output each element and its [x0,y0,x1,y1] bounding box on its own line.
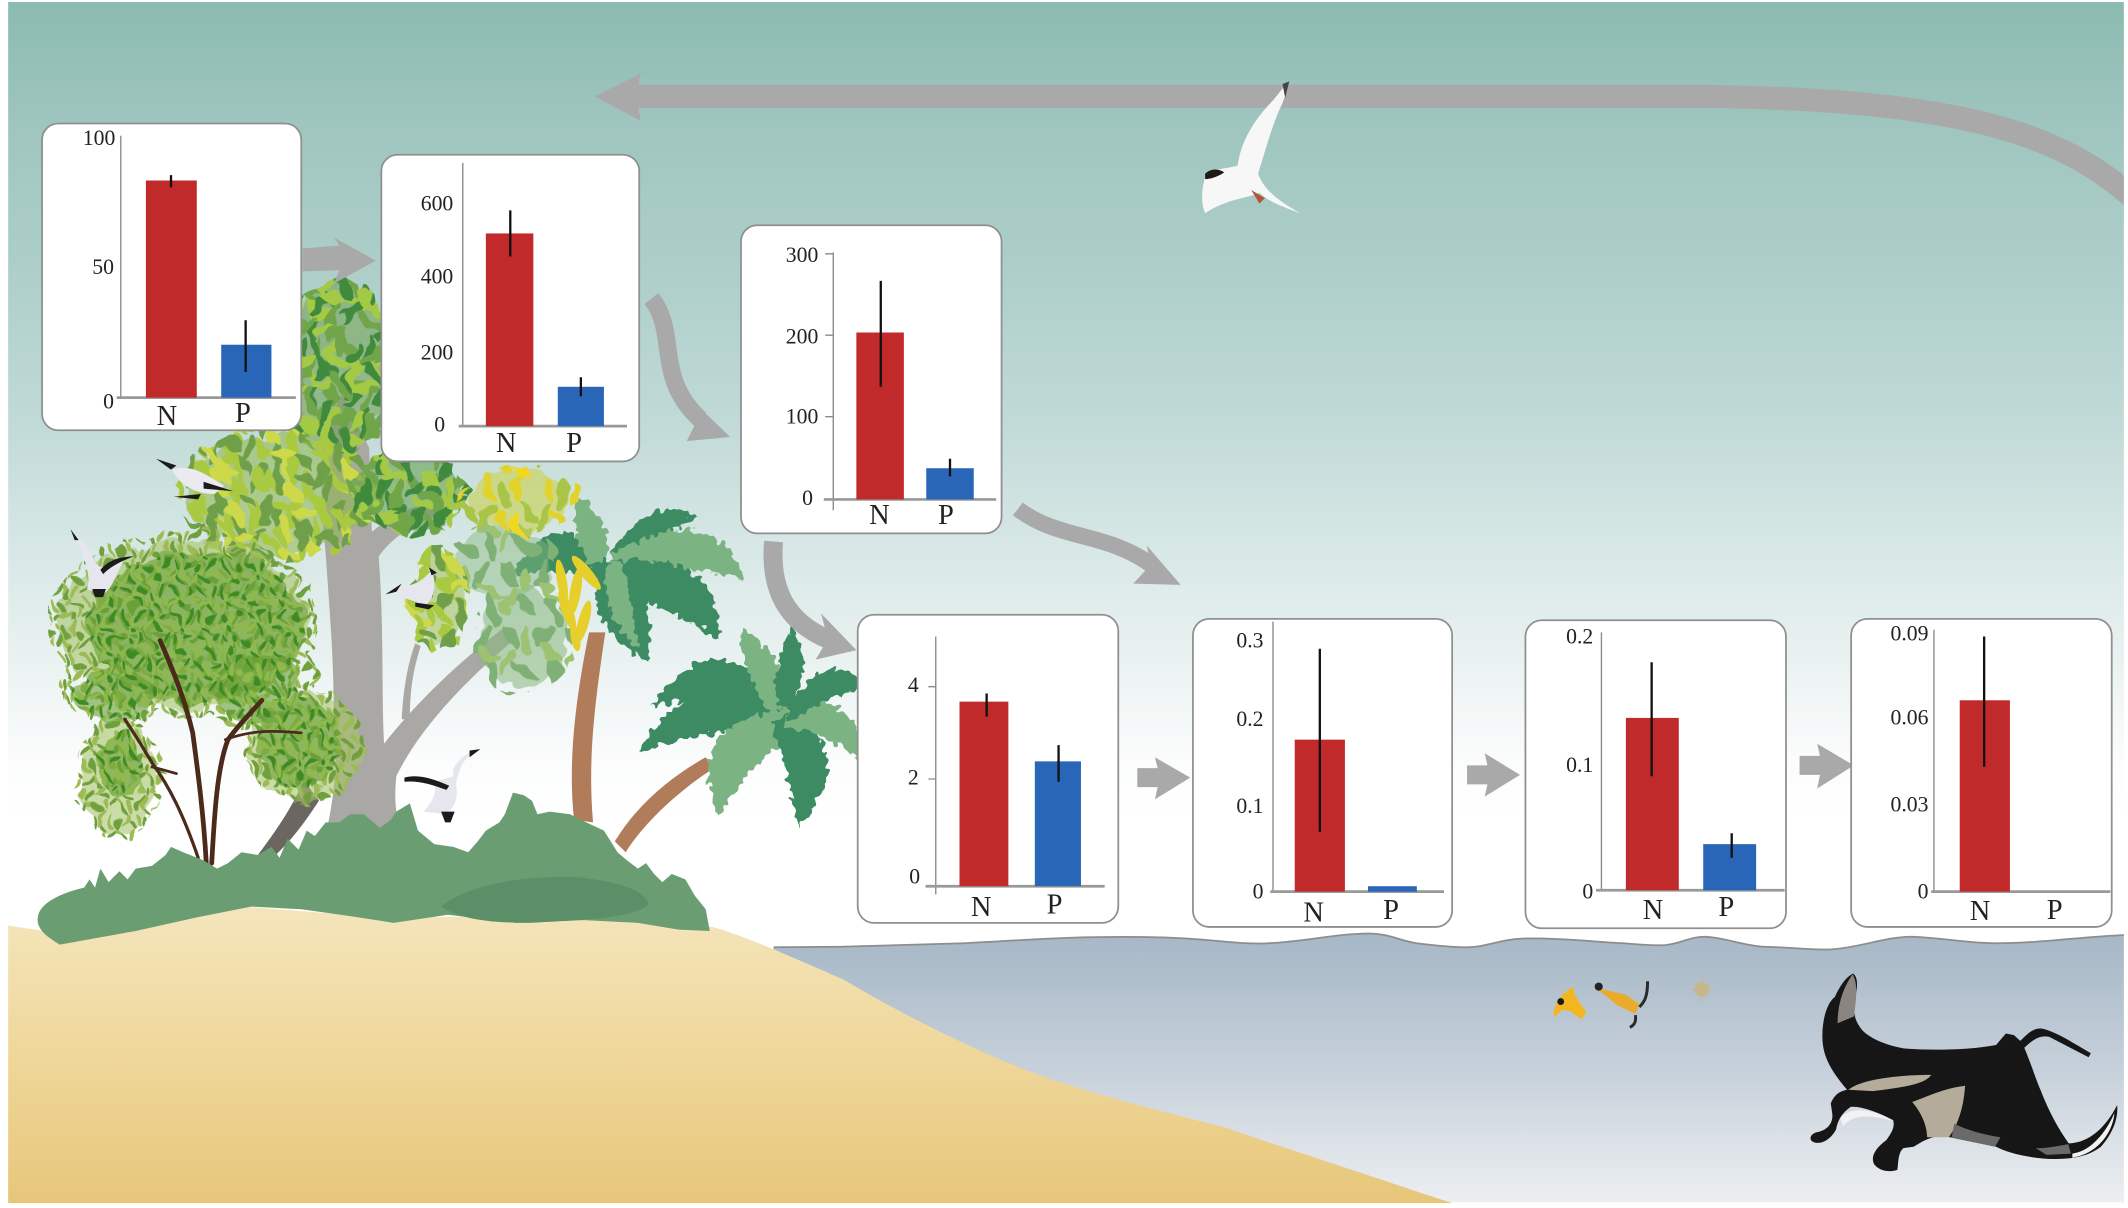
axes [1600,632,1602,890]
arrow: panel 3 to panel 4 [773,542,856,660]
panel 3: bar chart: N [869,500,890,531]
green crown, centre [347,448,467,535]
canopy leaves [178,280,578,692]
top return arrow [594,73,2128,198]
panel 6: bar chart: 0 [1582,879,1593,903]
error bars [987,694,1059,782]
panel 2: bar chart: 400 [421,265,453,289]
axes [928,637,936,894]
bars [1960,700,2010,892]
bars [1626,718,1679,890]
error bars [1319,649,1321,832]
ocean water [774,933,2124,1202]
yellow hanging leaves over the palm [553,553,604,652]
branches [125,641,301,863]
panel 3: bar chart: 100 [786,404,818,428]
icon: copepod [1595,981,1648,1027]
axes [825,252,833,510]
large grey tree [178,280,604,863]
labels: 4 [908,673,919,697]
manta tan markings [1848,1075,1965,1137]
arrow: panel 3 to open ocean [1018,509,1181,585]
palm tree 1 [513,497,744,822]
bird in tree, left [71,529,134,597]
arrow: panel 4 to panel 5 [1137,757,1190,799]
panel 3: bar chart: 200 [786,324,818,348]
axes [462,163,464,426]
error bars [1983,637,1985,767]
bird in tree, centre [385,567,437,609]
panel 5: bar chart: P [1383,895,1399,926]
panel 7: bar chart: 0.06 [1891,706,1929,730]
bars [856,333,904,499]
panel 7: bar chart: 0.03 [1891,793,1928,817]
arrow: panel 6 to panel 7 [1800,744,1854,789]
panel 1: bar chart [42,124,301,432]
pale green crown, lower right [471,584,574,692]
bars [146,181,197,398]
panel 4: bar chart: 0 [909,865,920,889]
panel 6: bar chart: N [1643,895,1663,926]
panel 5: bar chart: 0.2 [1236,707,1264,731]
labels: 0.2 [1566,624,1593,648]
panel 7: bar chart: N [1970,896,1990,927]
panel 4: bar chart: N [971,892,992,923]
panel 2: bar chart: 200 [421,341,453,365]
bars [960,702,1008,886]
yellow crown, right [459,464,578,535]
axes [1272,622,1274,892]
bird in tree, upper [156,459,233,499]
labels: 100 [83,126,115,150]
manta white stripes [1840,1110,2114,1158]
panel 6: bar chart: P [1718,892,1734,923]
panel 2: bar chart: P [566,428,582,459]
arrow: panel 2 to panel 3 [651,299,730,441]
panel 4: bar chart [858,615,1118,923]
axes [1933,630,1935,892]
darker bush patch [441,877,649,923]
panel 1: bar chart: N [157,401,177,432]
panel 3: bar chart: 0 [802,486,813,510]
panel 7: bar chart: 0 [1918,879,1929,903]
panel 5: bar chart: 0 [1253,879,1264,903]
panel 5: bar chart: N [1303,898,1324,929]
sandy beach [8,907,1452,1203]
palm 1 fronds [513,497,744,662]
manta grey belly [1952,1124,2071,1155]
error bars [171,175,246,372]
panel 2: bar chart: 0 [434,413,445,437]
panel 4: bar chart: 2 [908,765,919,789]
panel 2: bar chart: N [496,428,517,459]
panel 5: bar chart: 0.1 [1236,794,1264,818]
labels: 0.09 [1891,622,1928,646]
error bars [881,281,950,476]
bars [1295,740,1345,892]
icon: yellow plankton [1554,987,1586,1019]
panel 6: bar chart: 0.1 [1566,753,1593,777]
panel 7: bar chart: P [2047,895,2063,926]
manta grey wing tip [1838,974,1856,1023]
panel 5: bar chart [1193,619,1452,929]
green crown between panels [274,280,399,453]
panel 3: bar chart [741,225,1002,533]
panel 3: bar chart: P [938,500,954,531]
arrow: panel 5 to panel 6 [1467,753,1520,797]
arrow: panel 1 to panel 2 [303,238,376,284]
labels: 300 [786,243,818,267]
bars [486,233,533,426]
pale outer foliage [48,532,365,839]
palm 2 fronds [638,627,869,828]
error bars [1652,662,1732,858]
error bars [510,210,581,396]
wavy water surface line [774,933,2124,950]
icon: tiny larva [1691,977,1713,1002]
panel 2: bar chart [381,155,639,461]
page margin on the right [2124,0,2128,1208]
axes [120,136,122,398]
undergrowth bush [38,793,710,945]
panel 7: bar chart [1851,619,2112,927]
yellow-green crown below branch [407,546,467,654]
flying tern [1202,81,1300,213]
panel 6: bar chart [1525,620,1786,928]
manta ray [1811,973,2117,1171]
panel 1: bar chart: 0 [103,390,114,414]
panel 1: bar chart: 50 [92,255,114,279]
yellow-green crown, left [178,428,379,563]
bird on the bush [404,749,480,822]
tree trunk and branches [258,780,319,863]
labels: 0.3 [1236,628,1264,652]
small brown-stemmed tree [48,532,365,863]
pale green crown, middle right [448,520,562,607]
panel 1: bar chart: P [235,398,251,429]
panel 4: bar chart: P [1047,889,1062,920]
palm tree 2 [615,627,869,852]
labels: 600 [421,191,453,215]
foliage [48,532,365,839]
dark inner foliage [77,551,342,799]
